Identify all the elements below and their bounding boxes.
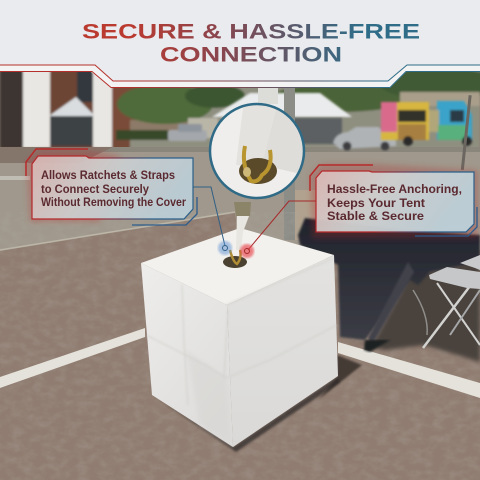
magnifier lens xyxy=(210,100,305,198)
shadow under table xyxy=(340,260,480,362)
ground texture xyxy=(0,212,480,480)
brass ring xyxy=(230,250,241,264)
white parking lines xyxy=(0,328,145,388)
callout text: to Connect Securely xyxy=(41,182,149,196)
callout text xyxy=(327,182,462,223)
callout: left xyxy=(26,149,197,225)
left leader line xyxy=(193,187,232,255)
building and trees backdrop xyxy=(0,60,480,150)
product: white covered cube xyxy=(141,202,340,452)
silver car xyxy=(333,127,396,150)
cover folds xyxy=(146,258,337,405)
cube top face xyxy=(141,228,334,305)
title: SECURE & HASSLE-FREE xyxy=(82,20,420,44)
road xyxy=(0,147,480,251)
dark tablecloth xyxy=(298,218,480,340)
cube right face xyxy=(227,255,338,447)
callout: right xyxy=(310,164,478,238)
food truck xyxy=(381,101,472,146)
cube left face xyxy=(141,263,233,447)
callout text: Stable & Secure xyxy=(327,209,424,223)
callout text: Without Removing the Cover xyxy=(41,195,186,209)
shadow of cube xyxy=(318,355,362,400)
header banner xyxy=(0,0,480,88)
callout text: Hassle-Free Anchoring, xyxy=(327,182,462,196)
callout outer frame xyxy=(415,207,477,236)
tent pole xyxy=(284,88,295,240)
folding chair xyxy=(413,255,480,348)
right leader line xyxy=(240,201,316,258)
callout outer frame xyxy=(132,197,197,225)
callout panel xyxy=(316,171,474,232)
callout text xyxy=(41,168,186,209)
callout panel xyxy=(32,156,193,219)
callout text: Allows Ratchets & Straps xyxy=(41,168,175,182)
callout text: Keeps Your Tent xyxy=(327,196,425,210)
center tent xyxy=(212,93,352,117)
title xyxy=(82,20,420,66)
strap xyxy=(236,216,249,250)
title: CONNECTION xyxy=(160,44,342,66)
anchor hole xyxy=(223,256,247,268)
